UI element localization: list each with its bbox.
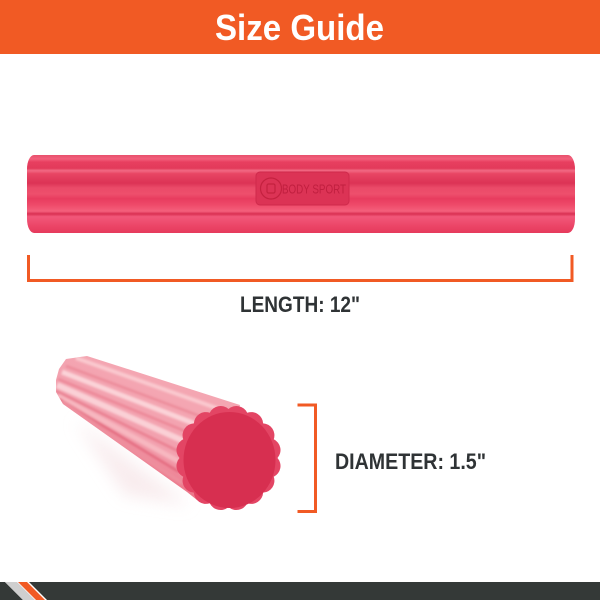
- logo text: BODY SPORT: [282, 182, 346, 196]
- product photo: flex bar end view: [56, 356, 281, 510]
- logo circle: [260, 178, 282, 199]
- header banner: [0, 0, 600, 54]
- diameter label: DIAMETER: 1.5": [335, 449, 486, 474]
- footer stripe grey: [5, 582, 35, 600]
- rod body: [56, 356, 240, 500]
- footer bar: [0, 582, 600, 600]
- diameter bracket: [298, 405, 316, 512]
- embossed logo plate: [256, 172, 349, 205]
- product photo: flex bar side view: [27, 155, 575, 233]
- length label: LENGTH: 12": [240, 292, 360, 317]
- scalloped end cap: [176, 406, 281, 510]
- length bracket: [28, 255, 572, 280]
- footer stripe white: [5, 582, 47, 600]
- title: Size Guide: [215, 7, 384, 48]
- footer stripe orange: [18, 582, 45, 600]
